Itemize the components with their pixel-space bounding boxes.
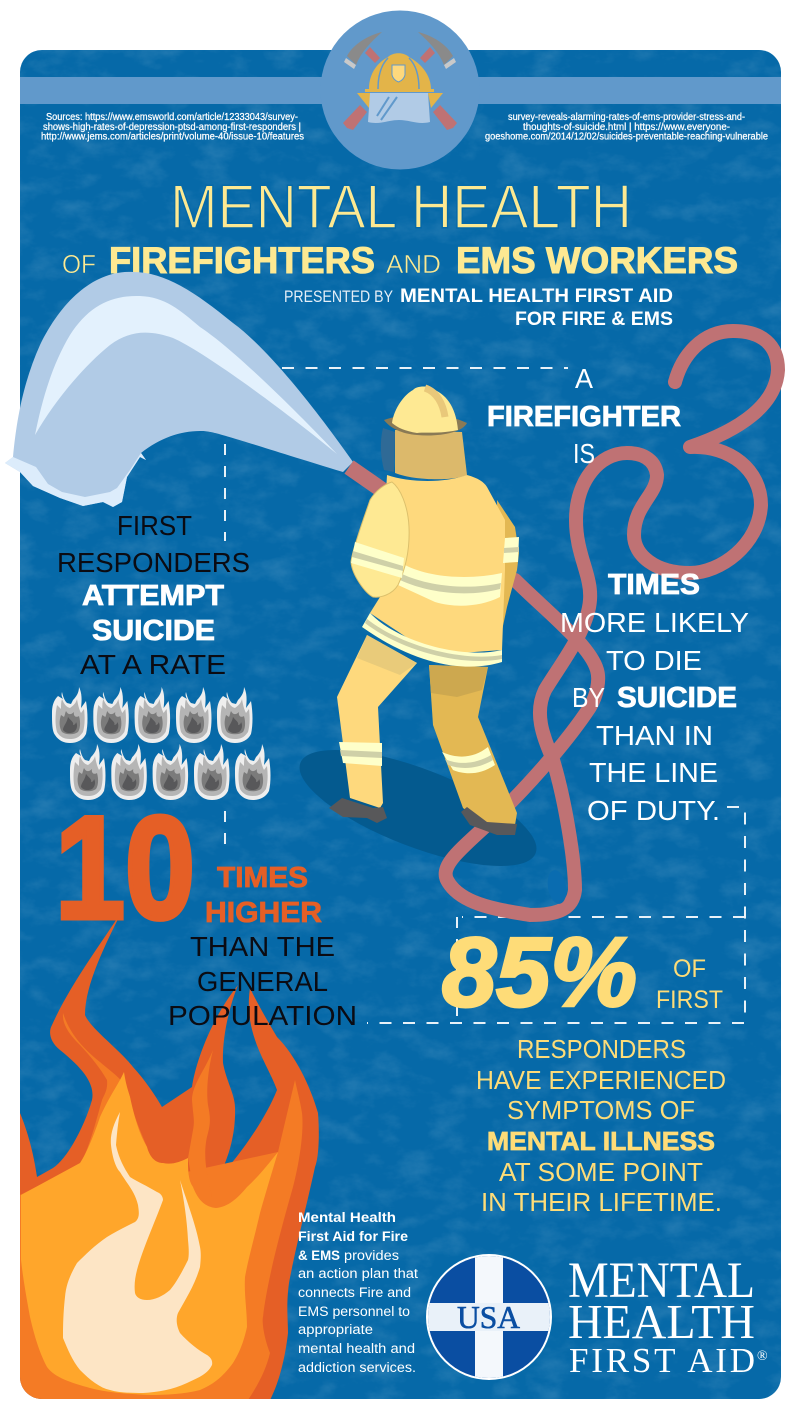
presented by: MENTAL HEALTH FIRST AID bbox=[400, 285, 673, 307]
logo: Mental Health First Aid wordmark bbox=[568, 1253, 768, 1380]
logo: Mental Health First Aid wordmark: FIRST AID bbox=[569, 1341, 755, 1380]
coat body bbox=[370, 475, 505, 655]
subtitle line: FIREFIGHTERS bbox=[109, 240, 375, 281]
subtitle line: EMS WORKERS bbox=[456, 240, 738, 281]
presented by: FOR FIRE & EMS bbox=[515, 308, 673, 330]
text block: 85 percent: RESPONDERS bbox=[517, 1036, 686, 1064]
text block: 85 percent: IN THEIR LIFETIME. bbox=[481, 1189, 722, 1217]
text block: 85 percent: OF bbox=[673, 955, 706, 983]
text block: program description: mental health and bbox=[298, 1341, 415, 1356]
left arm bbox=[351, 482, 409, 597]
text block: first responders attempt suicide: ATTEMPT bbox=[82, 580, 224, 612]
text block: 10 times higher: TIMES bbox=[217, 862, 308, 894]
text block: first responders attempt suicide: SUICIDE bbox=[92, 615, 215, 647]
presented by bbox=[284, 285, 673, 330]
text block: a firefighter is 3 times: IS bbox=[573, 438, 595, 469]
title bbox=[62, 173, 738, 281]
helmet bbox=[384, 414, 467, 436]
logo: Mental Health First Aid wordmark: ® bbox=[757, 1349, 768, 1364]
title: MENTAL HEALTH bbox=[170, 173, 632, 242]
text block: 10 times higher bbox=[55, 786, 357, 1031]
text block: first responders attempt suicide: RESPONDERS bbox=[57, 547, 250, 578]
text block: program description: Mental Health bbox=[298, 1210, 396, 1225]
text block: program description bbox=[298, 1210, 418, 1375]
text block: first responders attempt suicide: AT A RATE bbox=[80, 649, 226, 680]
text block: program description: provides bbox=[344, 1248, 399, 1263]
presented by: PRESENTED BY bbox=[284, 288, 393, 306]
fire hose forming a 3 and an 8 bbox=[349, 331, 778, 915]
text block: a firefighter is 3 times: SUICIDE bbox=[617, 682, 737, 714]
firefighter figure bbox=[329, 386, 519, 835]
water spray bbox=[5, 272, 353, 507]
logo: Mental Health First Aid wordmark: MENTAL bbox=[568, 1253, 755, 1309]
text block: sources left: Sources: https://www.emsworld.com/article/12333043/survey- bbox=[46, 112, 298, 123]
dashed connector lines bbox=[225, 368, 745, 1023]
logo: USA cross badge bbox=[425, 1250, 555, 1380]
text block: 85 percent: 85% bbox=[442, 917, 637, 1027]
text block: a firefighter is 3 times: TIMES bbox=[608, 569, 700, 601]
logo: Mental Health First Aid wordmark: HEALTH bbox=[568, 1294, 755, 1349]
text block: a firefighter is 3 times: TO DIE bbox=[606, 645, 702, 676]
text block: sources left bbox=[41, 112, 304, 142]
ground shadow bbox=[286, 726, 550, 890]
text block: sources left: shows-high-rates-of-depression-ptsd-among-first-responders | bbox=[43, 122, 301, 133]
text block: program description: an action plan that bbox=[298, 1266, 418, 1281]
boots bbox=[329, 798, 387, 823]
text block: a firefighter is 3 times: MORE LIKELY bbox=[560, 607, 749, 638]
text block: a firefighter is 3 times: THAN IN bbox=[596, 720, 713, 751]
text block: sources left: http://www.jems.com/articles/print/volume-40/issue-10/features bbox=[41, 132, 304, 142]
right leg bbox=[429, 665, 517, 826]
text block: 85 percent: HAVE EXPERIENCED bbox=[476, 1067, 726, 1095]
text block: 85 percent: AT SOME POINT bbox=[499, 1159, 703, 1187]
text block: a firefighter is 3 times: OF DUTY. bbox=[587, 795, 720, 826]
icon: firefighter helmet emblem bbox=[320, 10, 480, 170]
text block: a firefighter is 3 times: A bbox=[575, 363, 593, 394]
text block: program description: appropriate bbox=[298, 1322, 373, 1337]
text block: sources right: survey-reveals-alarming-rates-of-ems-provider-stress-and- bbox=[508, 112, 745, 123]
text block: 85 percent: FIRST bbox=[656, 986, 723, 1014]
big flame bbox=[20, 911, 319, 1400]
neck hood bbox=[395, 430, 467, 479]
text block: a firefighter is 3 times: FIREFIGHTER bbox=[487, 401, 681, 433]
logo: USA cross badge: USA bbox=[457, 1299, 520, 1335]
text block: 85 percent: MENTAL ILLNESS bbox=[487, 1128, 715, 1156]
text block: 10 times higher: GENERAL bbox=[197, 966, 328, 997]
text block: a firefighter is 3 times: BY bbox=[572, 682, 605, 713]
text block: first responders attempt suicide: FIRST bbox=[117, 510, 192, 541]
text block: a firefighter is 3 times: THE LINE bbox=[589, 757, 718, 788]
text block: sources right: goeshome.com/2014/12/02/suicides-preventable-reaching-vulnerable bbox=[485, 132, 768, 142]
icons: ten grey flames bbox=[52, 687, 270, 800]
text block: program description: EMS personnel to bbox=[298, 1304, 410, 1319]
text block: 10 times higher: THAN THE bbox=[190, 931, 335, 962]
water drop on hose loop bbox=[545, 869, 569, 905]
coat hem bbox=[362, 613, 502, 667]
subtitle line: AND bbox=[386, 249, 441, 279]
text block: 85 percent bbox=[442, 917, 726, 1217]
text block: program description: & EMS bbox=[298, 1248, 340, 1263]
text block: program description: addiction services. bbox=[298, 1360, 416, 1375]
left leg bbox=[337, 635, 417, 808]
text block: 85 percent: SYMPTOMS OF bbox=[507, 1097, 695, 1125]
text block: 10 times higher: HIGHER bbox=[205, 897, 322, 929]
text block: first responders attempt suicide bbox=[57, 510, 250, 680]
text block: program description: connects Fire and bbox=[298, 1285, 411, 1300]
text block: sources right bbox=[485, 112, 768, 142]
text block: a firefighter is 3 times bbox=[487, 363, 749, 826]
text block: program description: First Aid for Fire bbox=[298, 1229, 409, 1244]
header band bbox=[20, 77, 781, 104]
text block: sources right: thoughts-of-suicide.html | https://www.everyone- bbox=[523, 122, 730, 133]
subtitle line: OF bbox=[62, 249, 96, 279]
text block: 10 times higher: 10 bbox=[55, 786, 195, 949]
subtitle line bbox=[62, 240, 738, 281]
text block: 10 times higher: POPULATION bbox=[168, 1000, 357, 1031]
turnout coat sleeve shade bbox=[497, 500, 519, 640]
